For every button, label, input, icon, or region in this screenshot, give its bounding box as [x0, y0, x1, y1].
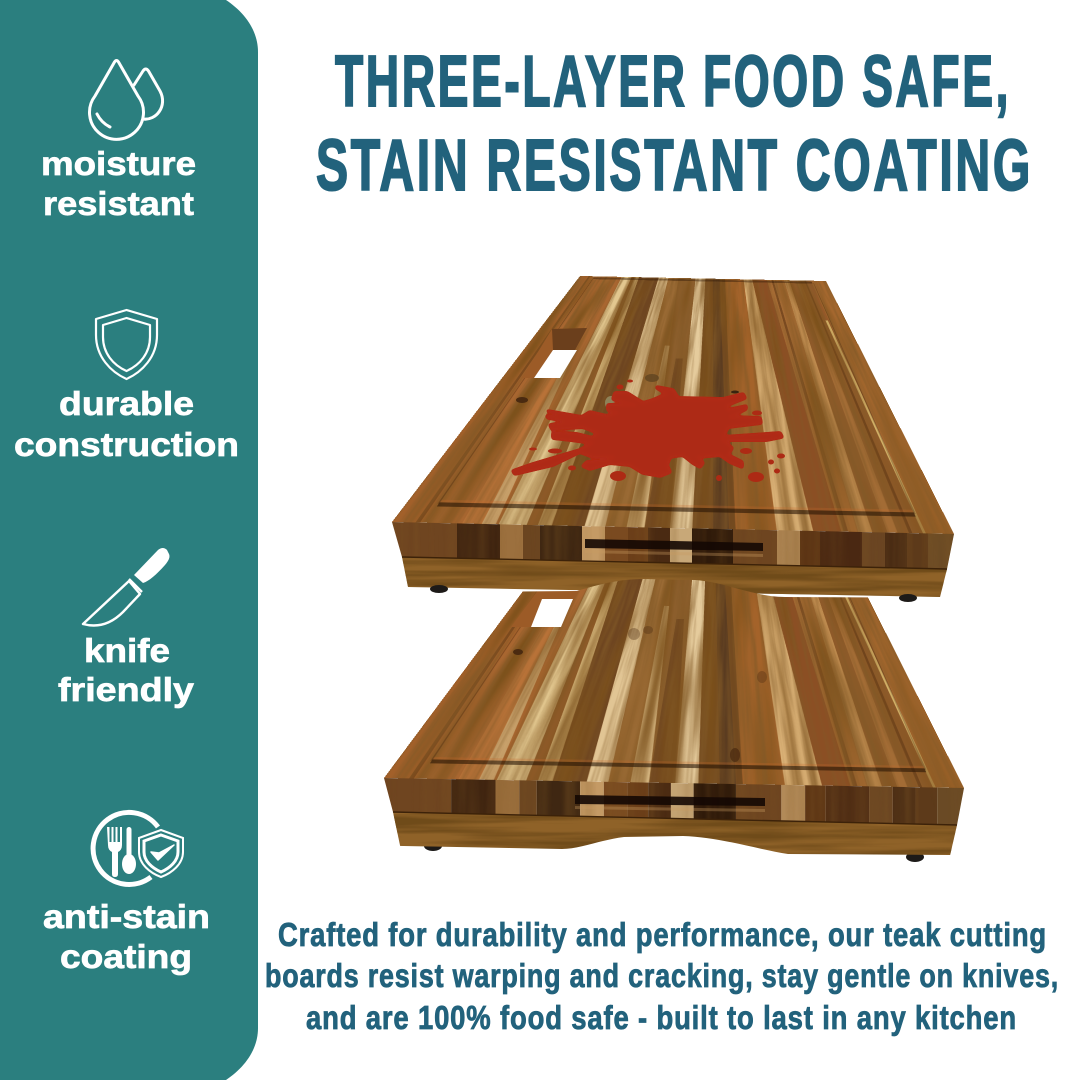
board base	[400, 555, 950, 599]
label: anti-stain coating: anti-stain	[43, 898, 210, 935]
sauce splat	[513, 380, 785, 482]
label: knife friendly: knife	[84, 632, 170, 669]
label: anti-stain coating: coating	[60, 938, 192, 975]
benefit: moisture resistant	[41, 60, 196, 222]
label: moisture resistant: resistant	[43, 185, 194, 222]
label: moisture resistant	[41, 145, 196, 222]
label: durable construction	[14, 385, 239, 463]
label: durable construction: construction	[14, 426, 239, 463]
handle cut-out	[512, 591, 574, 627]
label: knife friendly	[58, 632, 195, 708]
lower cutting board without stain	[384, 579, 964, 862]
benefit: durable construction	[14, 310, 239, 463]
label: anti-stain coating	[43, 898, 210, 975]
benefit: knife friendly	[58, 548, 195, 708]
board top surface	[392, 276, 954, 534]
label: moisture resistant: moisture	[41, 145, 196, 182]
icon: water drops	[89, 60, 163, 139]
handle cut-out	[522, 328, 587, 378]
upper cutting board with sauce splat	[392, 276, 954, 602]
icon: plate, cutlery and shield	[93, 812, 183, 884]
board front face	[392, 522, 954, 569]
icon: shield	[96, 310, 157, 379]
board base	[393, 811, 957, 855]
wood knots and flecks	[516, 374, 749, 427]
wood knots	[513, 626, 767, 762]
label: durable construction: durable	[59, 385, 194, 422]
board front face	[384, 778, 964, 825]
benefit: anti-stain coating	[43, 812, 210, 975]
panel: benefits sidebar	[0, 0, 258, 1080]
title	[316, 42, 1033, 205]
description text	[265, 916, 1059, 1036]
feet	[424, 841, 924, 862]
feet	[430, 585, 917, 602]
label: knife friendly: friendly	[58, 671, 195, 708]
board top surface	[384, 579, 964, 788]
icon: knife	[83, 548, 170, 626]
